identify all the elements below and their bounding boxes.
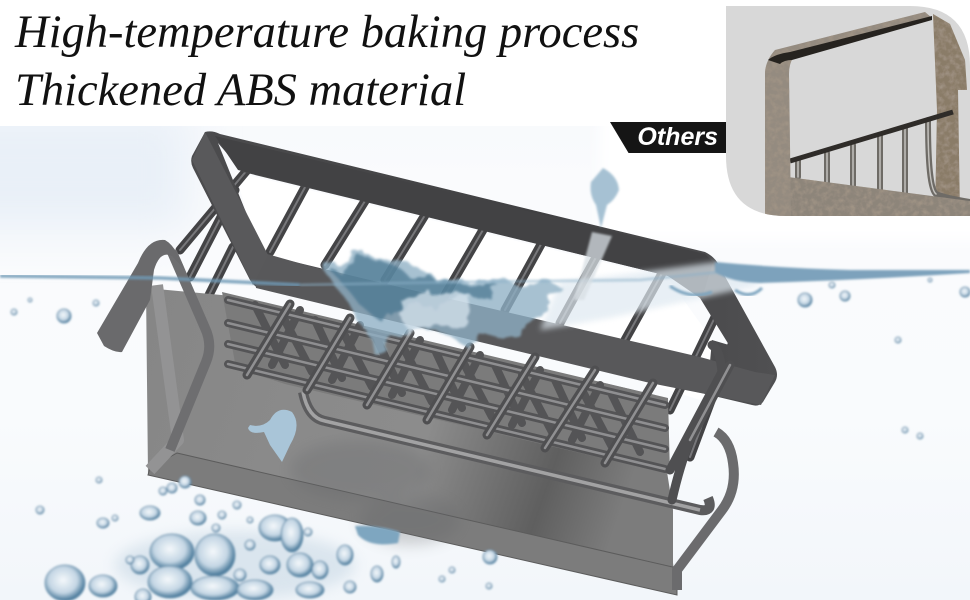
hook: [97, 240, 185, 352]
water surface and splash: [0, 168, 970, 544]
comparison inset: others: [726, 6, 970, 216]
lower bar: [790, 112, 953, 161]
droplet on floor: [248, 410, 297, 462]
bubble under tray right: [355, 526, 400, 544]
splash body: [322, 254, 560, 355]
water line right: [715, 262, 970, 283]
rusty left post and top band: [765, 12, 932, 216]
lattice backing: [222, 292, 670, 474]
splash light foam: [400, 292, 475, 335]
title background panel: [0, 0, 970, 126]
surface ripples right: [670, 286, 762, 295]
lower rail: [303, 392, 710, 510]
bubble cluster haze: [115, 531, 355, 599]
right post: [933, 14, 967, 216]
front rim band: [253, 250, 775, 405]
heading: [14, 7, 639, 116]
left rim edge: [192, 132, 268, 285]
individual bubbles: [11, 278, 970, 600]
lower rail highlight: [303, 392, 700, 510]
basket back bars: [180, 163, 733, 457]
white view through basket: [235, 172, 730, 400]
water line middle: [300, 272, 720, 285]
left side plate: [150, 285, 178, 470]
heading: Thickened ABS material: [15, 65, 466, 116]
floor front lip: [148, 453, 677, 595]
water line left: [0, 276, 300, 285]
murky water stains on floor: [290, 440, 460, 545]
lattice rails: [228, 300, 665, 469]
basket: [97, 131, 777, 595]
top rim: [191, 131, 777, 406]
pale reflection band: [574, 232, 612, 300]
water tint over basket right: [540, 262, 760, 330]
front bars: [247, 304, 730, 500]
top droplet: [591, 168, 619, 228]
left curved strap: [170, 252, 209, 450]
basket floor: [146, 288, 677, 595]
heading: High-temperature baking process: [15, 7, 639, 58]
back rim band: [215, 136, 713, 298]
bubbles: [11, 278, 970, 600]
bottom band: [788, 177, 970, 216]
right side plate: [677, 432, 734, 590]
label: others: [610, 122, 726, 153]
label: others: Others: [637, 123, 718, 151]
bars: [798, 120, 970, 202]
dark top shadow: [768, 16, 932, 64]
splash dark core: [332, 258, 500, 325]
